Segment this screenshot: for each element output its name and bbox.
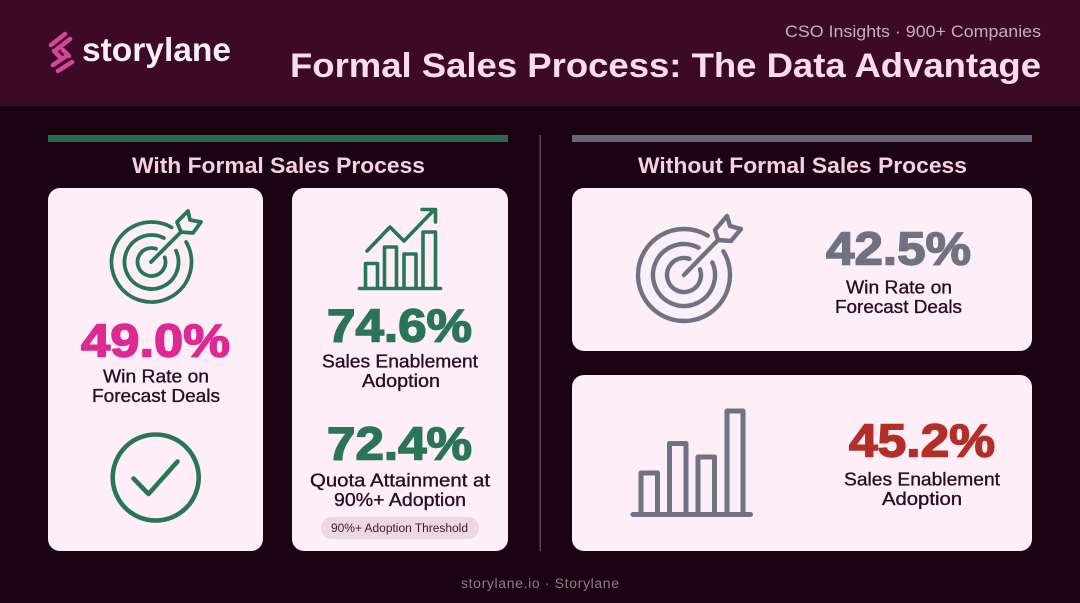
panel: with formal sales process bbox=[48, 135, 508, 551]
card: win rate bbox=[48, 188, 263, 551]
label: quota attainment: 90%+ Adoption bbox=[334, 490, 466, 510]
badge: adoption threshold bbox=[321, 517, 479, 539]
label: sales enablement adoption: Sales Enablement bbox=[844, 470, 1000, 490]
heading: with: With Formal Sales Process bbox=[132, 153, 425, 178]
heading: without: Without Formal Sales Process bbox=[638, 153, 967, 178]
stat: 72.4%: 72.4% bbox=[327, 418, 472, 470]
panel: without formal sales process bbox=[572, 135, 1032, 551]
card: enablement without bbox=[572, 375, 1032, 551]
icon: grey bar chart bbox=[633, 411, 750, 514]
badge: adoption threshold: 90%+ Adoption Threshold bbox=[331, 523, 468, 535]
label: win rate on forecast deals: Forecast Deals bbox=[835, 297, 962, 317]
label: win rate on forecast deals: Win Rate on bbox=[846, 278, 952, 298]
card: win rate without bbox=[572, 188, 1032, 351]
footer: storylane.io · Storylane bbox=[461, 575, 619, 591]
label: win rate on forecast deals bbox=[92, 366, 220, 406]
icon: check circle bbox=[113, 434, 199, 520]
stat: 74.6%: 74.6% bbox=[327, 300, 472, 352]
logo bbox=[51, 31, 231, 71]
label: sales enablement adoption: Adoption bbox=[362, 371, 440, 391]
label: win rate on forecast deals bbox=[835, 278, 962, 317]
label: win rate on forecast deals: Forecast Deals bbox=[92, 386, 220, 406]
label: win rate on forecast deals: Win Rate on bbox=[103, 366, 209, 386]
header band bbox=[0, 0, 1080, 106]
label: sales enablement adoption bbox=[322, 352, 478, 391]
icon: green growth chart bbox=[360, 210, 440, 288]
label: sales enablement adoption: Sales Enablement bbox=[322, 352, 478, 372]
card: enablement and quota bbox=[292, 188, 508, 551]
icon: green target bbox=[97, 207, 206, 317]
icon: grey target bbox=[621, 212, 747, 338]
stat: 45.2%: 45.2% bbox=[849, 414, 995, 466]
logo wordmark: storylane bbox=[82, 31, 231, 68]
title: Formal Sales Process: The Data Advantage bbox=[290, 47, 1041, 85]
label: quota attainment bbox=[310, 470, 490, 510]
icon: storylane logo mark bbox=[51, 34, 72, 71]
stat: 49.0%: 49.0% bbox=[81, 314, 230, 366]
stat: 42.5%: 42.5% bbox=[826, 222, 971, 274]
label: quota attainment: Quota Attainment at bbox=[310, 470, 490, 490]
label: sales enablement adoption: Adoption bbox=[882, 489, 962, 509]
label: sales enablement adoption bbox=[844, 470, 1000, 509]
source line: CSO Insights · 900+ Companies bbox=[785, 22, 1041, 41]
